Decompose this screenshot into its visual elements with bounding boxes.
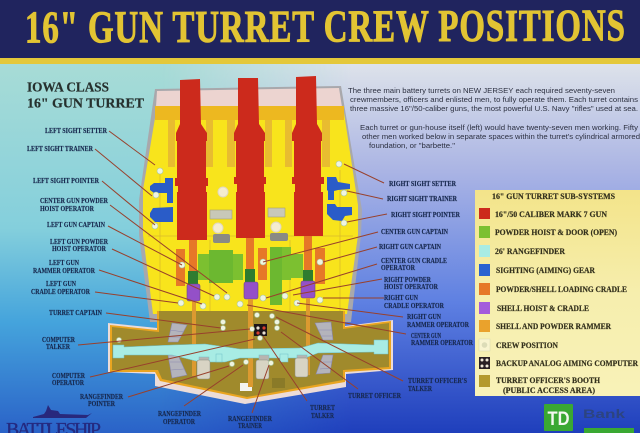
label: left sight setter [45, 128, 155, 165]
crew positions [116, 161, 347, 366]
legend item: rammer: SHELL AND POWDER RAMMER [496, 322, 611, 331]
label: rangefinder pointer: RANGEFINDER [80, 394, 123, 401]
label: rangefinder trainer: RANGEFINDER [228, 416, 272, 423]
legend item: rangefinder: 26' RANGEFINDER [495, 247, 565, 256]
diagram heading [27, 80, 145, 112]
label: left gun rammer operator: LEFT GUN [49, 260, 79, 267]
label: left gun captain: LEFT GUN CAPTAIN [47, 222, 105, 229]
label: center gun rammer operator: CENTER GUN [411, 333, 441, 340]
legend item: crew position: CREW POSITION [496, 341, 558, 350]
intro text: Each turret or gun-house itself (left) would have twenty-seven men working. Fifty [360, 123, 638, 132]
label: center gun cradle operator: OPERATOR [381, 265, 415, 272]
label: right gun cradle operator: CRADLE OPERATOR [384, 303, 444, 310]
label: turret talker: TURRET [310, 405, 335, 412]
label: right sight pointer [347, 212, 460, 222]
powder hoists and doors [198, 247, 303, 305]
label: left gun powder hoist operator: LEFT GUN POWDER [50, 239, 108, 246]
label: left gun powder hoist operator [50, 239, 214, 296]
label: rangefinder operator [158, 365, 243, 426]
label: turret talker: TALKER [311, 413, 334, 420]
label: left sight pointer: LEFT SIGHT POINTER [33, 178, 99, 185]
diagram heading: 16" GUN TURRET [27, 96, 145, 112]
label: left gun cradle operator [31, 281, 178, 303]
label: rangefinder trainer [228, 365, 272, 430]
shell hoists, cradles and rammers [176, 236, 325, 311]
label: left gun captain [47, 222, 182, 265]
legend item: loading cradle: POWDER/SHELL LOADING CRADLE [496, 285, 627, 294]
label: center gun powder hoist operator: HOIST OPERATOR [40, 206, 94, 213]
label: computer talker: COMPUTER [42, 337, 75, 344]
turret officer's booth [108, 305, 393, 404]
legend item: rangefinder [479, 245, 565, 257]
label: rangefinder pointer [80, 366, 229, 408]
turret diagram [108, 76, 393, 404]
gun house hull [139, 86, 362, 322]
intro text: other men worked below in separate spaces within the turret's cylindrical armored [362, 132, 640, 141]
training rollers [168, 322, 333, 378]
label: turret officer's talker [276, 317, 467, 393]
label: right powder hoist operator: HOIST OPERATOR [384, 284, 438, 291]
label: computer talker [42, 329, 250, 351]
logo: TD Bank: TD [548, 409, 570, 430]
label: center gun powder hoist operator [40, 198, 227, 293]
label: right gun cradle operator [323, 295, 444, 310]
intro text [348, 86, 640, 150]
label: turret captain: TURRET CAPTAIN [49, 310, 102, 317]
label: left sight pointer [33, 178, 155, 225]
label: turret officer: TURRET OFFICER [348, 393, 401, 400]
label: center gun captain [263, 229, 448, 262]
label: center gun rammer operator [247, 305, 473, 347]
label: turret officer [281, 332, 401, 400]
label: right sight trainer [347, 191, 457, 203]
panel: legend of turret sub-systems [475, 190, 640, 396]
right gun [292, 76, 324, 236]
legend item: rammer [479, 320, 611, 332]
label: left gun rammer operator [33, 260, 202, 304]
label: left gun cradle operator: CRADLE OPERATOR [31, 289, 90, 296]
label: rangefinder pointer: POINTER [88, 401, 115, 408]
label: left sight setter: LEFT SIGHT SETTER [45, 128, 107, 135]
rangefinder [113, 340, 388, 379]
logo: TD Bank [544, 404, 634, 433]
label: center gun cradle operator: CENTER GUN CRADLE [381, 258, 447, 265]
label: right sight setter: RIGHT SIGHT SETTER [389, 181, 456, 188]
legend item: shell hoist: SHELL HOIST & CRADLE [497, 304, 589, 313]
label: left sight trainer: LEFT SIGHT TRAINER [27, 146, 93, 153]
legend item: officer's booth [479, 375, 601, 395]
sighting gear [150, 177, 352, 222]
intro text: foundation, or "barbette." [369, 141, 455, 150]
left gun [175, 79, 208, 240]
label: computer operator: COMPUTER [52, 373, 85, 380]
title banner: 16" GUN TURRET CREW POSITIONS [25, 0, 625, 53]
label: rangefinder operator: RANGEFINDER [158, 411, 201, 418]
label: center gun powder hoist operator: CENTER GUN POWDER [40, 198, 108, 205]
label: center gun cradle operator [266, 258, 447, 298]
label: right gun cradle operator: RIGHT GUN [384, 295, 418, 302]
label: computer talker: TALKER [46, 344, 70, 351]
legend item: crew position [479, 339, 558, 351]
rangefinder and hoist machinery [210, 187, 288, 243]
center gun [234, 78, 266, 238]
legend item: officer's booth: (PUBLIC ACCESS AREA) [503, 386, 595, 395]
legend item: gun: 16"/50 CALIBER MARK 7 GUN [495, 210, 607, 219]
legend item: officer's booth: TURRET OFFICER'S BOOTH [496, 376, 601, 385]
label: right gun rammer operator [297, 303, 469, 329]
legend item: backup computer [479, 357, 638, 369]
label: rangefinder trainer: TRAINER [238, 423, 262, 430]
label: computer operator [52, 339, 255, 387]
legend item: shell hoist [479, 302, 589, 314]
label: rangefinder operator: OPERATOR [163, 419, 195, 426]
label: right powder hoist operator: RIGHT POWDER [384, 277, 431, 284]
label: right gun captain [323, 244, 441, 262]
label: center gun rammer operator: RAMMER OPERATOR [411, 340, 473, 347]
label: right sight setter [344, 164, 456, 188]
label: left gun cradle operator: LEFT GUN [46, 281, 76, 288]
logo: Battleship [6, 405, 101, 433]
label: computer operator: OPERATOR [52, 380, 84, 387]
legend item: loading cradle [479, 283, 627, 295]
backup analog aiming computer [254, 324, 267, 336]
legend item: powder hoist: POWDER HOIST & DOOR (OPEN) [495, 228, 617, 237]
label: right gun rammer operator: RAMMER OPERATOR [407, 322, 469, 329]
label: center gun captain: CENTER GUN CAPTAIN [381, 229, 448, 236]
intro text: three massive 16"/50-caliber guns, the most powerful U.S. Navy "rifles" used at sea. [350, 104, 638, 113]
label: left gun powder hoist operator: HOIST OPERATOR [52, 246, 106, 253]
label: turret talker [263, 336, 335, 420]
legend item: sighting gear: SIGHTING (AIMING) GEAR [496, 266, 595, 275]
label: right powder hoist operator [293, 277, 438, 295]
legend heading: 16" GUN TURRET SUB-SYSTEMS [492, 192, 616, 201]
label: right sight pointer: RIGHT SIGHT POINTER [391, 212, 460, 219]
label: left sight trainer [27, 146, 152, 196]
label: right gun rammer operator: RIGHT GUN [407, 314, 441, 321]
label: right gun captain: RIGHT GUN CAPTAIN [379, 244, 441, 251]
label: right sight trainer: RIGHT SIGHT TRAINER [387, 196, 457, 203]
legend item: sighting gear [479, 264, 595, 276]
legend item: powder hoist [479, 226, 617, 238]
intro text: crewmembers, officers and enlisted men, to fully operate them. Each turret contains [350, 95, 638, 104]
label: left gun rammer operator: RAMMER OPERATOR [33, 268, 95, 275]
logo: TD Bank: Bank [583, 407, 625, 421]
intro text: The three main battery turrets on NEW JERSEY each required seventy-seven [348, 86, 615, 95]
label: turret officer's talker: TALKER [408, 386, 432, 393]
label: turret officer's talker: TURRET OFFICER'S [408, 378, 467, 385]
label: turret captain [49, 310, 221, 328]
diagram heading: IOWA CLASS [27, 80, 109, 96]
